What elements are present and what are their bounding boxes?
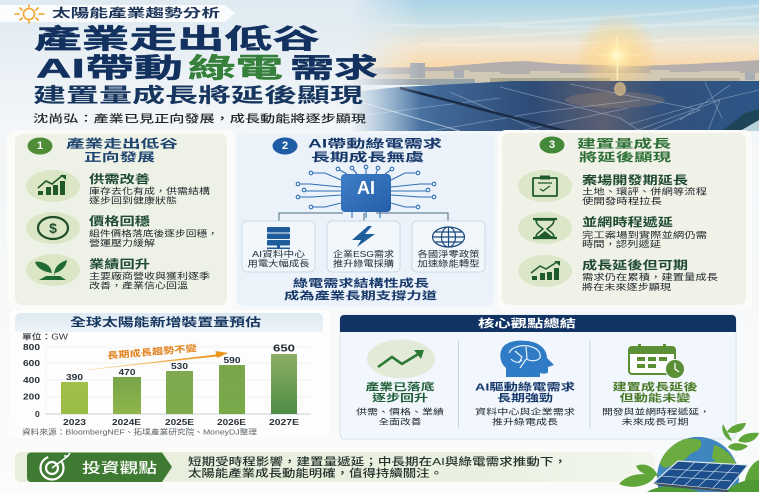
column: AI-driven demand: 推升綠電成長: [492, 416, 558, 426]
icon: AI head: [500, 341, 554, 377]
column: delayed momentum: 建置成長延後: [612, 380, 698, 394]
panel: bar chart of global solar installations: [9, 310, 330, 438]
value labels: 530: [171, 361, 188, 371]
item: price: 營運壓力緩解: [89, 237, 155, 248]
icon: target: [36, 452, 70, 484]
column: AI-driven demand: 長期強勁: [497, 392, 553, 404]
item: project development: 土地、環評、併網等流程: [582, 186, 707, 196]
item: delayed growth: 成長延後但可期: [582, 258, 688, 272]
column: delayed momentum: 但動能未變: [620, 392, 690, 404]
icon: clipboard: [518, 170, 572, 202]
value labels: [66, 344, 296, 382]
solar panel: [653, 461, 748, 492]
y axis labels: 600: [23, 358, 40, 368]
badge 2: [272, 138, 298, 154]
item: supply demand: 逐步回到健康狀態: [89, 194, 177, 206]
subtitle: 建置量成長將延後顯現: [33, 83, 363, 107]
box: net-zero policy: [412, 221, 485, 272]
panel heading: 將延後顯現: [579, 150, 672, 164]
summary header: 核心觀點總結: [478, 316, 576, 330]
title: 產業走出低谷: [34, 24, 320, 54]
investment text: 短期受時程影響，建置量遞延；中長期在AI與綠電需求推動下，: [188, 455, 567, 468]
icon: growth bars: [518, 255, 572, 287]
box: corporate ESG: [327, 221, 400, 272]
panel: industry recovery: [7, 130, 235, 310]
icon: calendar with clock: [629, 344, 684, 378]
illustration: globe with solar panel and leaves: [619, 423, 759, 492]
item: delayed growth: 需求仍在累積，建置量成長: [582, 271, 718, 282]
title: 需求: [290, 54, 378, 84]
icon: sprout: [26, 254, 80, 286]
box: data center: [242, 221, 315, 272]
badge 2: 2: [282, 140, 288, 152]
item: supply demand: 供需改善: [89, 172, 150, 186]
badge 1: 1: [37, 140, 43, 152]
value labels: 650: [273, 344, 296, 354]
panel heading: 正向發展: [84, 150, 156, 164]
icon: dollar coin: $: [49, 220, 57, 236]
category labels: 2027E: [269, 417, 299, 427]
title: 綠電: [188, 54, 283, 84]
icon: sun: [15, 5, 44, 23]
panel takeaway: [284, 276, 438, 302]
category labels: 2023: [63, 417, 86, 427]
category labels: [63, 417, 299, 427]
item: price: 價格回穩: [89, 214, 151, 228]
panel heading: 建置量成長: [577, 136, 672, 150]
column: delayed momentum: 未來成長可期: [622, 416, 688, 426]
y axis labels: [23, 342, 40, 419]
globe: [657, 437, 739, 492]
top tag: report category: [0, 5, 235, 23]
item: grid connection: 時間，認列遞延: [582, 238, 661, 249]
y axis labels: 0: [35, 409, 40, 419]
panel takeaway: 綠電需求結構性成長: [293, 276, 430, 290]
item: delayed growth: [582, 258, 718, 292]
category labels: 2026E: [217, 417, 246, 427]
column: AI-driven demand: 資料中心與企業需求: [475, 406, 575, 416]
column: bottomed out: 逐步回升: [372, 392, 428, 404]
summary header: [340, 315, 736, 332]
investment text: 太陽能產業成長動能明確，值得持續關注。: [188, 466, 443, 480]
panel heading: [66, 136, 179, 164]
panel heading: AI帶動綠電需求: [308, 136, 443, 150]
source: 資料來源：BloombergNEF、拓墣產業研究院、MoneyDJ整理: [22, 426, 258, 436]
badge 1: [28, 138, 52, 154]
tag text: 太陽能產業趨勢分析: [52, 5, 220, 20]
item: price: [89, 214, 218, 248]
category labels: 2025E: [165, 417, 194, 427]
column: delayed momentum: [602, 380, 710, 426]
panel: installation delay: [498, 130, 752, 310]
title: AI帶動: [36, 54, 183, 84]
panel: AI green power demand: [237, 134, 494, 306]
icon: dollar coin: [26, 212, 80, 244]
tag: investment view: 投資觀點: [82, 460, 157, 476]
item: project development: 案場開發期延長: [582, 173, 689, 187]
value labels: 590: [224, 355, 241, 365]
byline: 沈尚弘：產業已見正向發展，成長動能將逐步顯現: [33, 112, 367, 125]
item: supply demand: 庫存去化有成，供需結構: [89, 185, 210, 196]
chart title: 全球太陽能新增裝置量預估: [70, 315, 262, 329]
panel heading: [577, 136, 672, 164]
item: earnings: 改善，產業信心回溫: [89, 280, 188, 290]
badge 3: 3: [549, 139, 555, 151]
item: supply demand: [89, 172, 210, 206]
item: grid connection: 完工案場到實際並網仍需: [582, 229, 707, 240]
item: project development: [582, 173, 707, 206]
panel heading: 長期成長無虞: [311, 150, 424, 164]
investment text: [188, 455, 567, 480]
box: data center: 用電大幅成長: [248, 258, 310, 268]
box: corporate ESG: 企業ESG需求: [333, 249, 395, 259]
item: delayed growth: 將在未來逐步顯現: [582, 281, 671, 292]
item: earnings: 業績回升: [89, 257, 151, 271]
icon: hourglass: [518, 212, 572, 244]
tag: investment view: [27, 452, 172, 484]
category labels: 2024E: [112, 417, 141, 427]
box: net-zero policy: 各國淨零政策: [418, 249, 480, 259]
column: bottomed out: [356, 380, 444, 426]
item: project development: 使開發時程拉長: [582, 195, 662, 206]
column: AI-driven demand: AI驅動綠電需求: [475, 380, 575, 394]
value labels: 470: [118, 367, 136, 377]
column: delayed momentum: 開發與並網時程遞延，: [602, 406, 710, 416]
item: price: 組件價格落底後逐步回穩，: [89, 228, 218, 238]
column: bottomed out: 產業已落底: [366, 380, 434, 394]
item: earnings: 主要廠商營收與獲利逐季: [89, 270, 210, 281]
icon: AI chip with circuit lines: AI: [357, 178, 375, 198]
column: AI-driven demand: [475, 380, 575, 426]
box: net-zero policy: 加速綠能轉型: [418, 258, 480, 268]
header photo: solar farm at sunset: [350, 0, 759, 131]
panel: investment view banner: [9, 446, 655, 487]
panel takeaway: 成為產業長期支撐力道: [284, 289, 438, 302]
panel heading: 產業走出低谷: [66, 136, 179, 150]
column: bottomed out: 供需、價格、業績: [356, 406, 444, 416]
icon: up arrow trend: [367, 340, 435, 378]
panel heading: [308, 136, 443, 164]
box: data center: AI資料中心: [252, 249, 306, 259]
value labels: 390: [66, 372, 83, 382]
leaves: [619, 423, 759, 492]
arrow: long-term trend: 長期成長趨勢不變: [107, 342, 197, 361]
title: [34, 24, 378, 84]
y axis labels: 800: [23, 342, 40, 352]
icon: AI chip with circuit lines: [296, 165, 436, 218]
column: bottomed out: 全面改善: [378, 416, 422, 426]
item: earnings: [89, 257, 210, 290]
icon: rising bars: [26, 170, 80, 202]
panel: key takeaways summary: [340, 315, 736, 439]
arrow: long-term trend: [88, 342, 228, 370]
item: grid connection: 並網時程遞延: [582, 215, 674, 229]
box: corporate ESG: 推升綠電採購: [333, 258, 395, 268]
item: grid connection: [582, 215, 707, 249]
y axis labels: 200: [23, 392, 40, 402]
badge 3: [540, 136, 564, 154]
bars: [61, 354, 297, 414]
y axis labels: 400: [23, 375, 40, 385]
unit: 單位：GW: [22, 332, 69, 342]
